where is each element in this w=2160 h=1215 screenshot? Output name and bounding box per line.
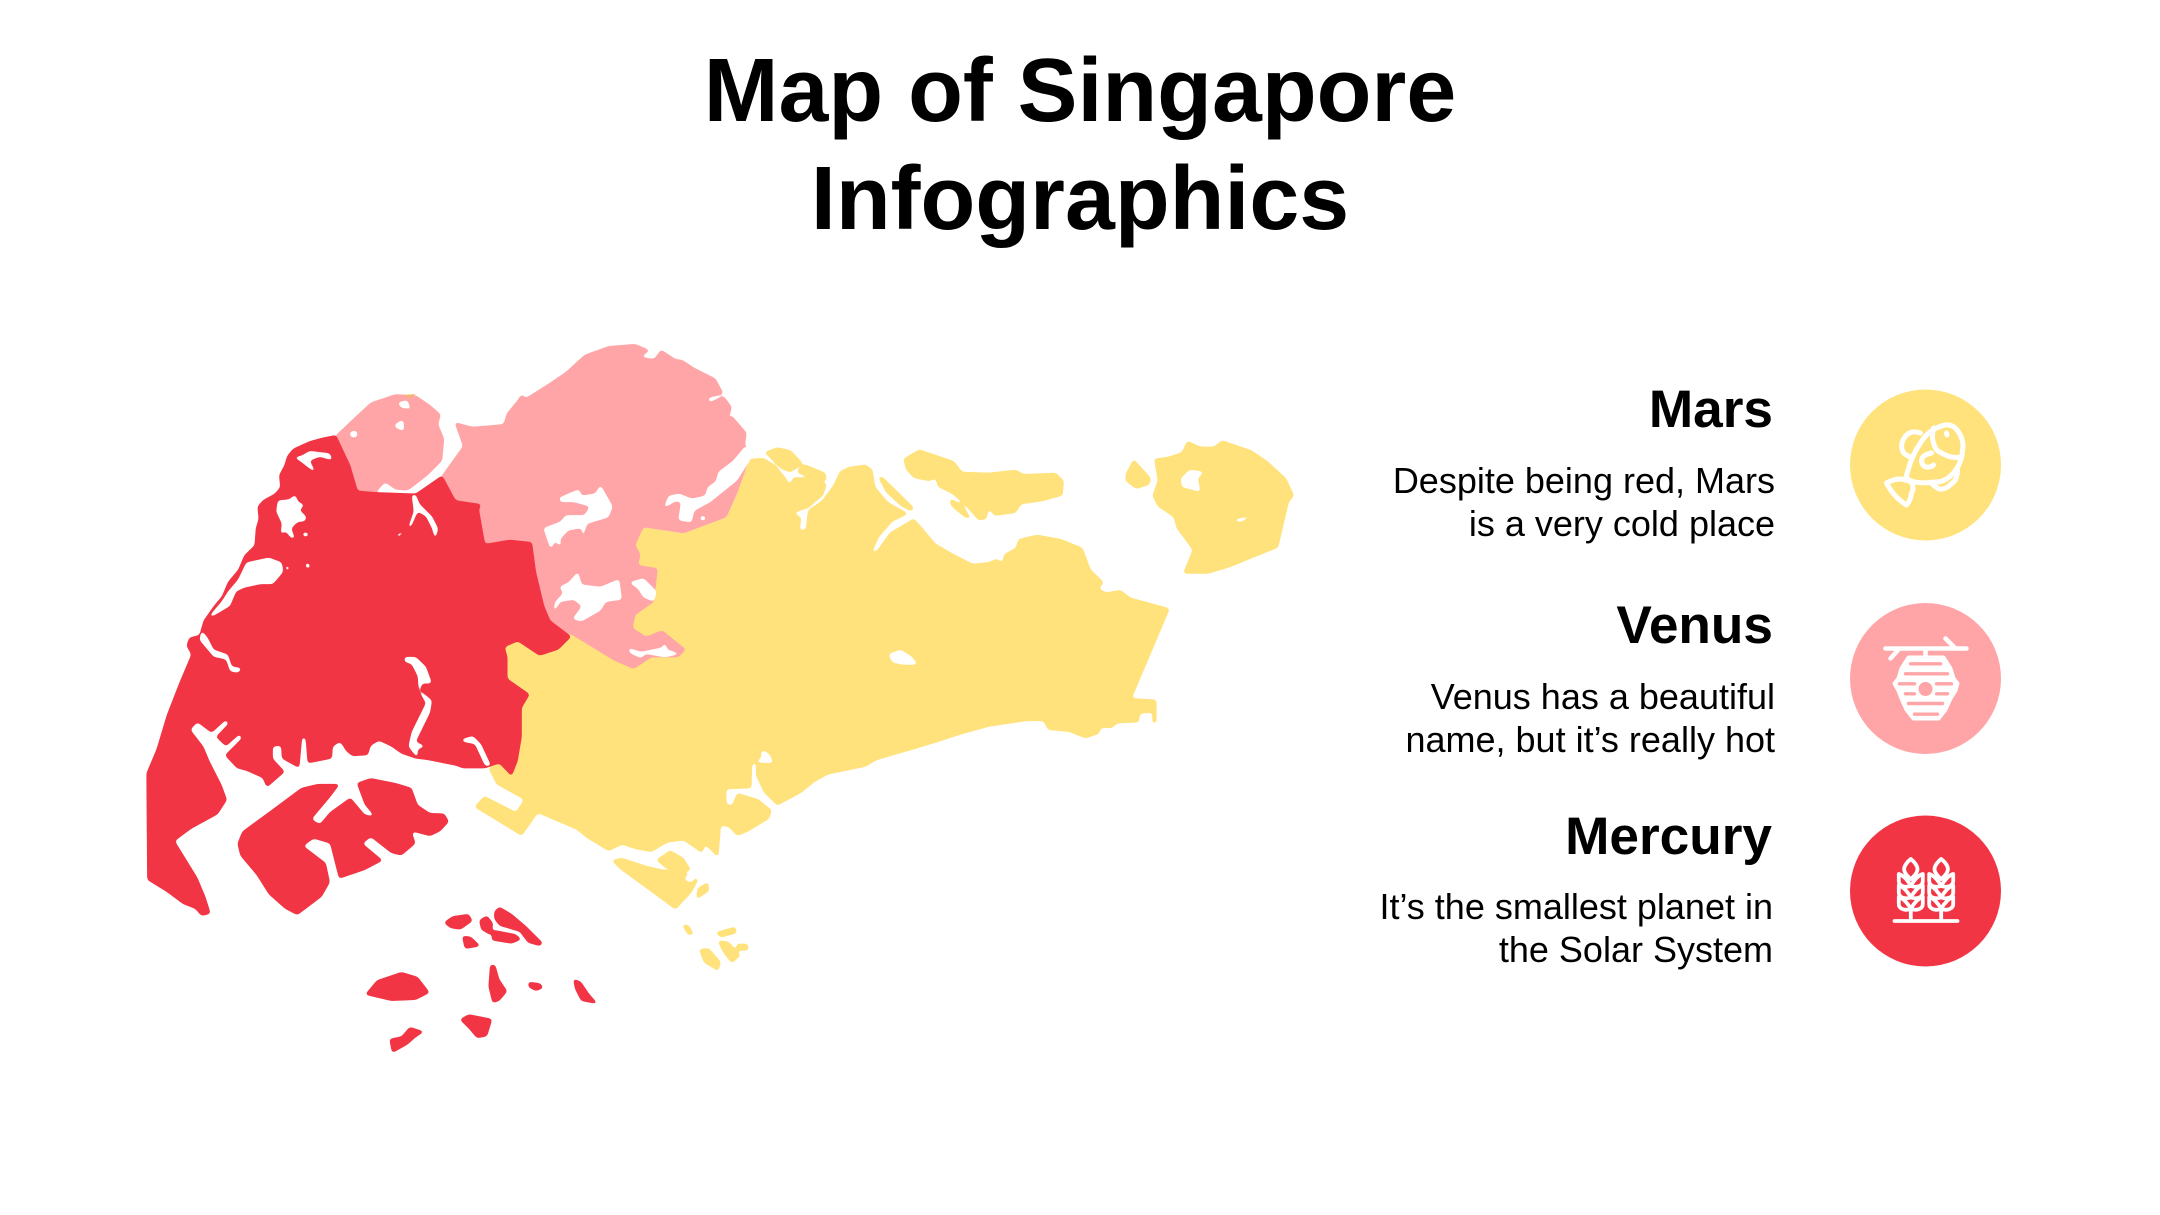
island: Sentosa [611,858,699,910]
region: red west [146,435,599,1053]
river: Kranji [396,494,438,541]
island: Tekong [1152,440,1294,574]
lake: east [888,650,918,665]
island: small [696,882,709,900]
island: Pulau Brani [656,850,692,872]
island: Coney west [764,447,803,473]
river: Poyan [199,630,242,673]
river: Pandan [461,736,491,766]
title [704,41,1456,249]
reservoir: Seletar [543,485,613,550]
text: Mercury description: the Solar System [1499,929,1773,970]
text: Venus description: Venus has a beautiful [1431,676,1775,717]
channel: Punggol [663,445,751,523]
text: Mars description: Despite being red, Mars [1393,460,1775,501]
canal [627,642,681,658]
heading: Venus: Venus [1616,596,1773,655]
creek: north-west [293,451,333,474]
island: Coney east [796,464,827,481]
map of Singapore [146,344,1294,1053]
heading: Mars: Mars [1649,380,1773,439]
reservoir: Peirce [552,572,622,621]
detail: orange speck [405,394,416,398]
inlets: south coast [337,748,393,761]
title: Infographics [811,149,1349,249]
island: Ubin [903,449,1064,520]
region: pink north-east and north-west [332,344,749,669]
legend item: Venus [1405,596,2001,760]
dot [700,516,706,521]
text: Mercury description: It’s the smallest planet in [1379,886,1773,927]
text: Venus description [1405,676,1775,760]
title: Map of Singapore [704,41,1456,141]
legend item: Mars [1393,380,2001,544]
reservoir: Tengeh [208,558,283,618]
region: yellow east [474,440,1294,971]
west pink spots [350,400,416,437]
icon: fish in yellow circle [1850,390,2001,540]
southern islets [681,924,749,971]
text: Mars description [1393,460,1775,544]
southern islands [365,906,599,1053]
island: Ubin sliver [949,498,972,520]
heading: Mercury: Mercury [1565,807,1772,866]
water bodies: reservoirs, rivers and channels [199,400,918,766]
legend item: Mercury [1379,807,2001,970]
icon: wheat in red circle [1850,816,2001,966]
text: Mercury description [1379,886,1773,970]
reservoir: Sarimbun [276,494,310,571]
text: Mars description: is a very cold place [1469,503,1775,544]
island: Tekong small [1126,459,1151,489]
reservoir: MacRitchie [629,578,657,602]
text: Venus description: name, but it’s really hot [1405,719,1775,760]
river: Jurong [404,657,432,759]
icon: beehive in pink circle [1850,603,2001,754]
island: Jurong [237,778,449,915]
island: channel sliver [877,476,914,512]
